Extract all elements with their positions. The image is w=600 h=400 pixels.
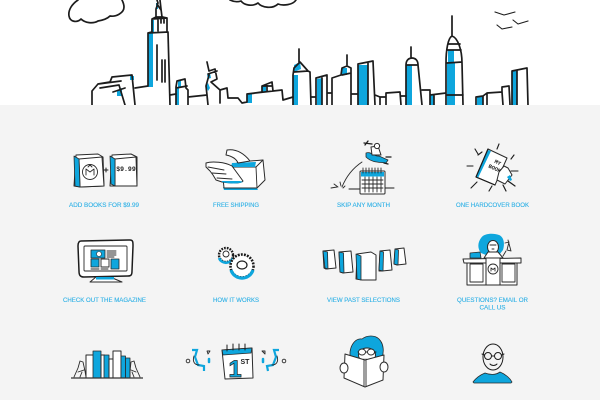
label line two: CALL US — [480, 304, 506, 312]
cloud right — [230, 0, 296, 7]
label: SKIP ANY MONTH — [337, 202, 390, 209]
label: CHECK OUT THE MAGAZINE — [63, 297, 146, 304]
icon: row of books — [323, 248, 406, 280]
icon: hand holding book: BOOK — [487, 163, 503, 175]
right buildings — [476, 68, 528, 105]
tile: past selections — [323, 248, 406, 304]
label: QUESTIONS? EMAIL OR — [457, 297, 528, 304]
tile: one hardcover book — [456, 144, 530, 209]
left low building — [92, 75, 135, 105]
icon: winged box — [206, 150, 265, 190]
icon: books between readers — [71, 351, 143, 378]
tile: free shipping — [206, 150, 265, 209]
blue building shading — [117, 3, 517, 105]
tile: how it works — [213, 248, 259, 304]
birds — [495, 12, 528, 29]
icon: hand holding book: MY — [493, 158, 503, 168]
tile: magazine — [63, 240, 146, 304]
icon: person leaping over calendar — [331, 141, 394, 194]
tile: bookshelf — [71, 351, 143, 378]
grey content panel — [0, 105, 600, 400]
icon: bald man portrait — [473, 344, 512, 383]
tile: skip any month — [331, 141, 394, 209]
icon: calendar with confetti: ST — [241, 359, 250, 366]
icon: woman reading book — [340, 336, 388, 387]
skyline illustration — [69, 0, 528, 105]
icon: calendar with confetti — [186, 344, 286, 383]
icon: desktop monitor — [78, 240, 133, 282]
cloud left — [69, 0, 124, 23]
twin tower section — [293, 49, 406, 105]
tile: first of month — [186, 344, 286, 383]
label: HOW IT WORKS — [213, 297, 259, 304]
mid skyline outline — [176, 62, 293, 105]
icon: gears — [219, 248, 254, 278]
icon: calendar with confetti: 1 — [228, 356, 242, 383]
icon: librarian at desk — [463, 234, 521, 285]
empire state building — [135, 0, 176, 105]
icon: two books: $9.99 — [116, 166, 136, 173]
tall spire towers — [406, 16, 463, 105]
label: ONE HARDCOVER BOOK — [456, 202, 530, 209]
label: FREE SHIPPING — [213, 202, 259, 209]
tile: man with glasses — [473, 344, 512, 383]
label: VIEW PAST SELECTIONS — [327, 297, 400, 304]
tile: reader — [340, 336, 388, 387]
icon: hand holding book — [467, 144, 518, 191]
tile: questions — [457, 234, 528, 312]
tile: add books — [69, 154, 139, 209]
label: ADD BOOKS FOR $9.99 — [69, 202, 139, 209]
